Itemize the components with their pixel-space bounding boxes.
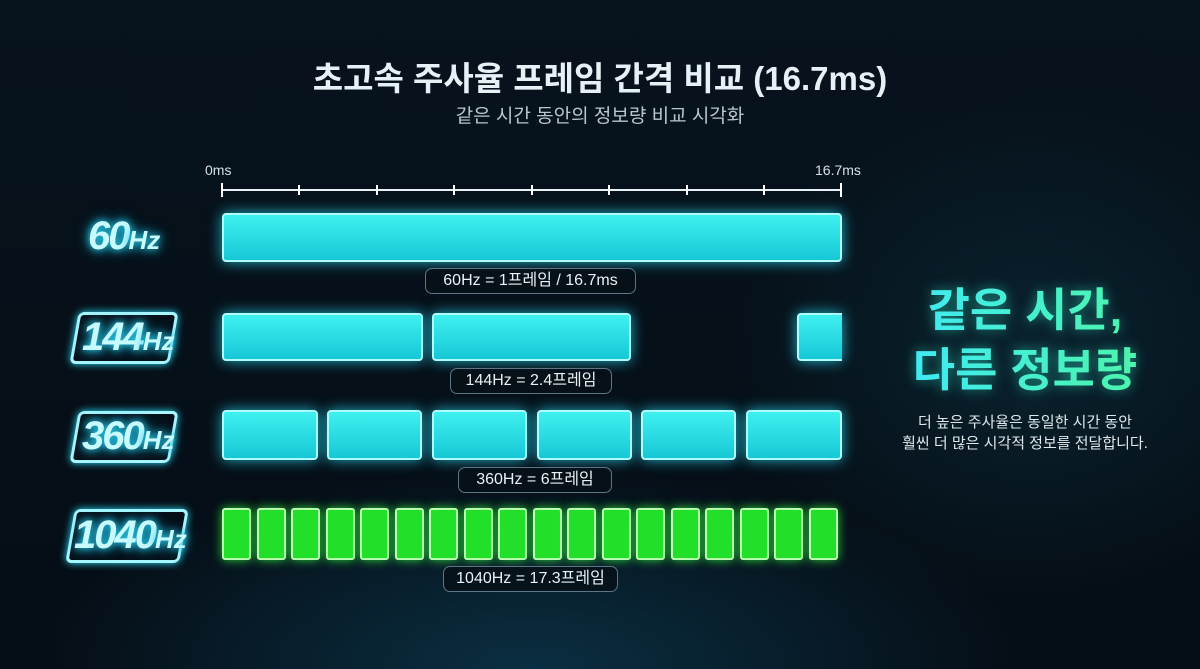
bars: 144Hz [211,302,853,372]
axis: 0ms [205,162,231,178]
label: 1040Hz: 1040Hz [74,513,187,557]
label: 1040Hz [60,502,194,570]
description: 더 높은 주사율은 동일한 시간 동안 [918,414,1132,431]
label: 144Hz [64,306,184,370]
label: 144Hz: 144Hz [82,315,175,359]
bar: 60Hz [222,213,842,262]
bars: 360Hz [211,399,853,471]
caption: 60Hz: 60Hz = 1프레임 / 16.7ms [443,272,618,289]
label: 60Hz: 60Hz [88,214,160,258]
description [902,414,1148,452]
label: 360Hz: 360Hz [82,414,175,458]
label: 360Hz [64,404,184,470]
headline: right: 같은 시간, [928,284,1122,336]
caption: 1040Hz: 1040Hz = 17.3프레임 [456,570,605,587]
caption: 144Hz: 144Hz = 2.4프레임 [466,372,596,389]
caption: 60Hz [425,268,636,294]
headline: right [875,280,1175,400]
axis [205,162,861,197]
description: 훨씬 더 많은 시각적 정보를 전달합니다. [902,435,1148,452]
headline: right: 다른 정보량 [913,344,1137,396]
bars: 1040Hz [214,500,846,568]
caption: 144Hz [450,368,612,394]
title: 초고속 주사율 프레임 간격 비교 (16.7ms) [313,60,887,97]
subtitle: 같은 시간 동안의 정보량 비교 시각화 [456,106,744,127]
caption: 1040Hz [443,566,618,592]
axis: 16.7ms [815,162,861,178]
caption: 360Hz [458,467,612,493]
caption: 360Hz: 360Hz = 6프레임 [476,471,594,488]
